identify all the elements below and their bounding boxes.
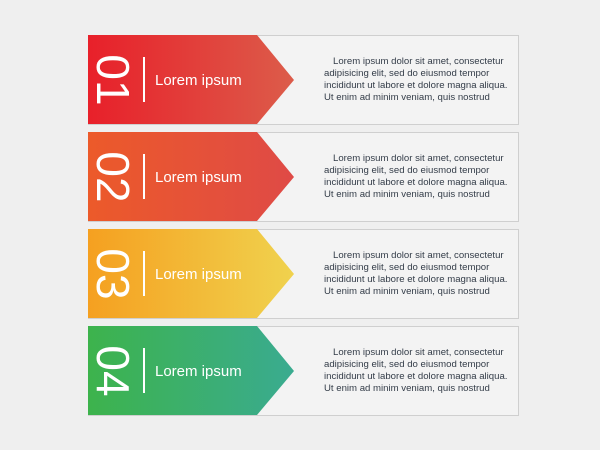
arrow 03 [88, 229, 294, 318]
card 02 [88, 132, 518, 222]
number 01: 01 [87, 54, 139, 106]
body text 04: adipisicing elit, sed do eiusmod tempor [324, 359, 490, 370]
body text 03: incididunt ut labore et dolore magna aliqua. [324, 274, 507, 285]
number 03: 03 [87, 248, 139, 300]
divider 03 [143, 251, 145, 296]
heading 01: Lorem ipsum [155, 72, 242, 89]
arrow 02 [88, 132, 294, 221]
body text 01: Lorem ipsum dolor sit amet, consectetur [333, 56, 504, 67]
arrow 01 [88, 35, 294, 124]
body text 02: Lorem ipsum dolor sit amet, consectetur [333, 153, 504, 164]
body text 02: Ut enim ad minim veniam, quis nostrud [324, 189, 490, 200]
arrow 04 [88, 326, 294, 415]
body text 03: adipisicing elit, sed do eiusmod tempor [324, 262, 490, 273]
body text 04: incididunt ut labore et dolore magna aliqua. [324, 371, 507, 382]
body text 01: adipisicing elit, sed do eiusmod tempor [324, 68, 490, 79]
divider 01 [143, 57, 145, 102]
panel: step 04 [87, 326, 518, 416]
panel: step 03 [87, 229, 518, 318]
number 04: 04 [87, 345, 139, 397]
body text 04: Ut enim ad minim veniam, quis nostrud [324, 383, 490, 394]
divider 04 [143, 348, 145, 393]
card 03 [88, 230, 518, 318]
heading 04: Lorem ipsum [155, 363, 242, 380]
body text 03: Lorem ipsum dolor sit amet, consectetur [333, 250, 504, 261]
number 02: 02 [87, 151, 139, 203]
heading 03: Lorem ipsum [155, 266, 242, 283]
body text 01: incididunt ut labore et dolore magna aliqua. [324, 80, 507, 91]
body text 03: Ut enim ad minim veniam, quis nostrud [324, 286, 490, 297]
panel: step 01 [87, 35, 518, 124]
body text 04: Lorem ipsum dolor sit amet, consectetur [333, 347, 504, 358]
panel: step 02 [87, 132, 518, 222]
body text 02: incididunt ut labore et dolore magna aliqua. [324, 177, 507, 188]
divider 02 [143, 154, 145, 199]
body text 02: adipisicing elit, sed do eiusmod tempor [324, 165, 490, 176]
card 04 [88, 326, 518, 416]
heading 02: Lorem ipsum [155, 169, 242, 186]
card 01 [88, 36, 518, 124]
body text 01: Ut enim ad minim veniam, quis nostrud [324, 92, 490, 103]
